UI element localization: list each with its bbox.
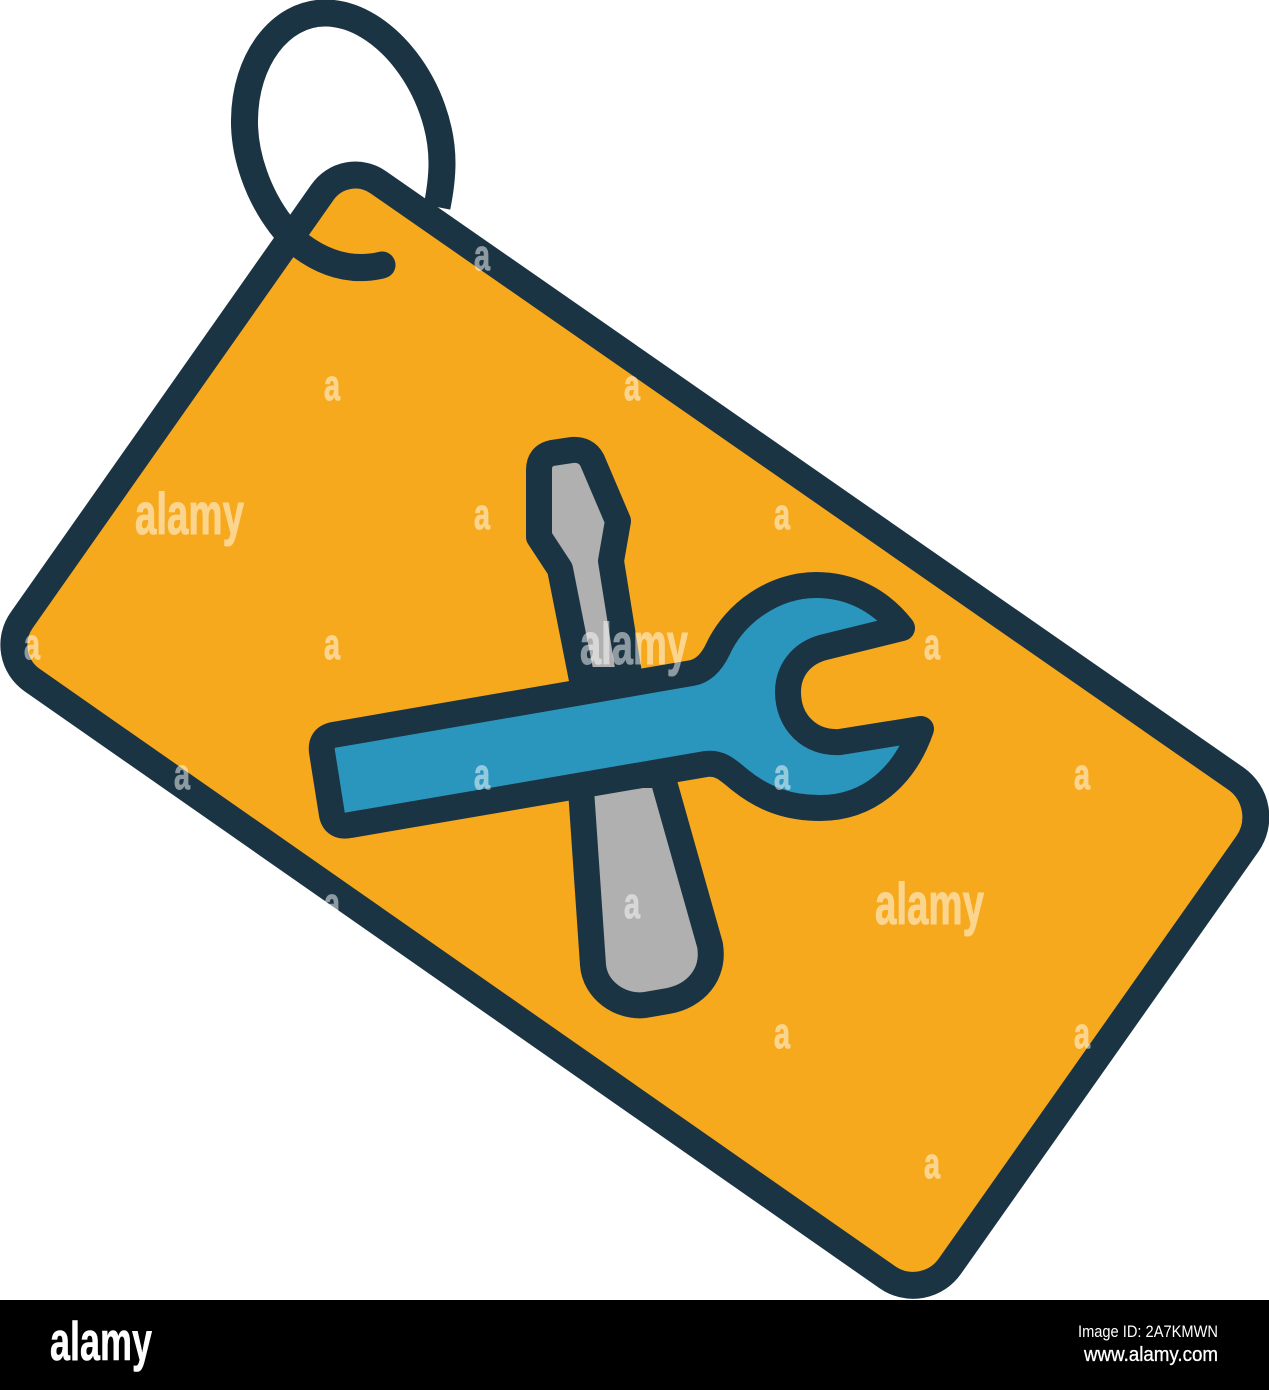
tag body [14,175,1256,1285]
footer logo: alamy [50,1310,152,1372]
watermark: small alamy marks: a [774,1009,790,1058]
watermark: small alamy marks: a [774,750,790,799]
watermark: small alamy marks: a [474,750,490,799]
watermark: large alamy marks: alamy [875,872,984,937]
watermark: small alamy marks: a [624,361,640,410]
watermark: large alamy marks: alamy [580,612,688,677]
watermark: small alamy marks [24,231,1090,1188]
watermark: small alamy marks: a [324,879,340,928]
watermark: small alamy marks: a [624,879,640,928]
watermark: small alamy marks: a [1074,1009,1090,1058]
watermark: small alamy marks: a [324,620,340,669]
watermark: small alamy marks: a [324,361,340,410]
watermark: small alamy marks: a [174,750,190,799]
watermark: small alamy marks: a [474,231,490,280]
watermark: small alamy marks: a [474,490,490,539]
watermark: small alamy marks: a [24,620,40,669]
watermark: small alamy marks: a [924,620,940,669]
image id: Image ID: 2A7KMWN [1078,1322,1218,1341]
tag ring back [244,13,442,225]
watermark: large alamy marks [135,482,984,937]
watermark: small alamy marks: a [774,490,790,539]
footer url: www.alamy.com [1083,1344,1218,1366]
tag ring front [281,225,382,268]
footer bar [0,1300,1269,1390]
wrench [322,585,921,826]
screwdriver [539,450,711,1005]
watermark: large alamy marks: alamy [135,482,244,547]
watermark: small alamy marks: a [924,1139,940,1188]
watermark: small alamy marks: a [1074,750,1090,799]
